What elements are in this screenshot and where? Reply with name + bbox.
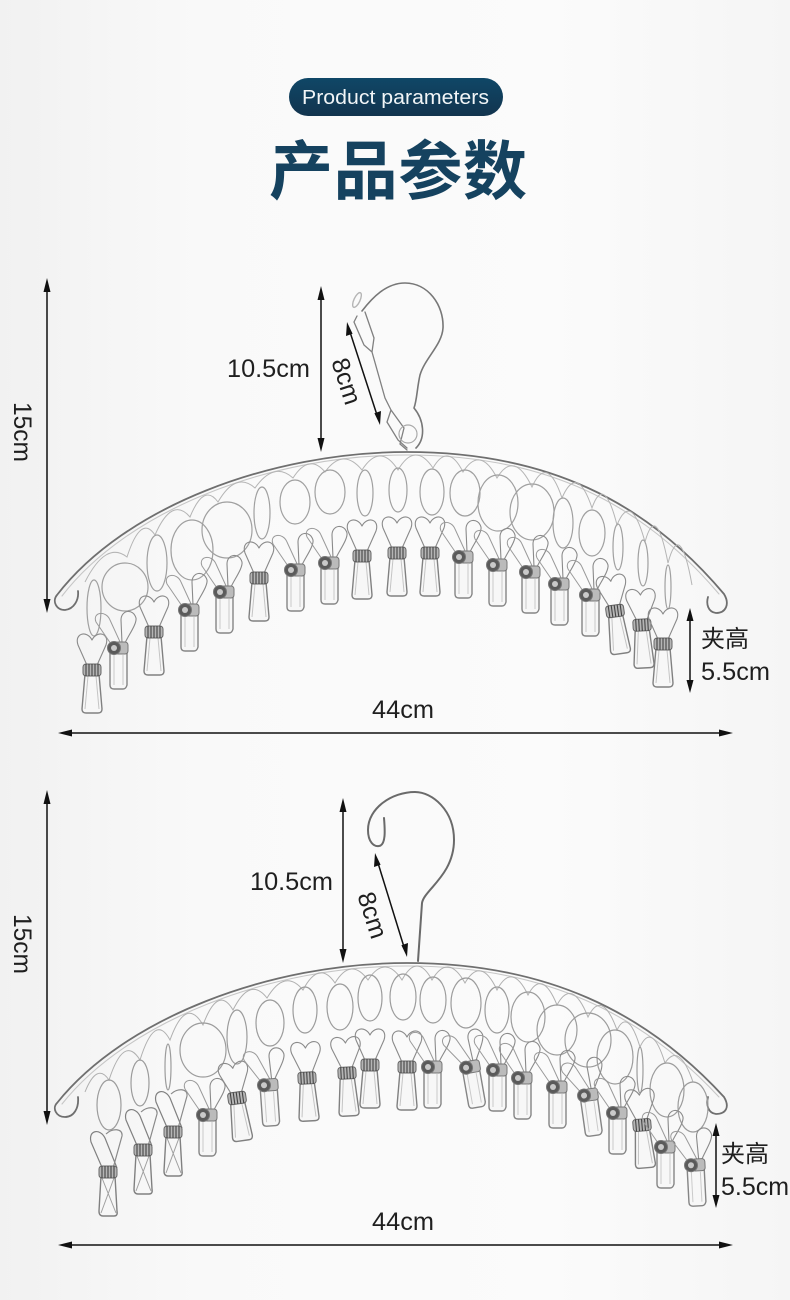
dimension: 10.5cm hook height, bottom: 10.5cm <box>250 868 333 896</box>
one-piece hook <box>368 792 454 961</box>
dimension: 8cm hook opening, top: 8cm <box>325 355 367 408</box>
dimension: clip height 5.5cm, top <box>686 608 770 693</box>
dimension: width 44cm, bottom <box>58 1208 733 1248</box>
hook with folding links <box>351 283 443 450</box>
badge: Product parameters: Product parameters <box>302 87 489 109</box>
dimension: width 44cm, bottom: 44cm <box>372 1208 434 1236</box>
dimension: 10.5cm hook height, top: 10.5cm <box>227 355 310 383</box>
dimension: clip height 5.5cm, bottom: 5.5cm <box>721 1173 789 1201</box>
main curved bar <box>55 452 727 613</box>
hanger diagram: bottom, with fixed hook <box>55 792 727 1216</box>
dimension: 15cm total height, top: 15cm <box>8 402 36 462</box>
dimension: clip height 5.5cm, bottom: 夹高 <box>721 1141 769 1168</box>
scalloped inner wire <box>85 455 692 585</box>
dimension: 10.5cm hook height, top <box>227 286 324 452</box>
rings <box>97 974 708 1132</box>
dimension: clip height 5.5cm, top: 5.5cm <box>701 658 770 686</box>
badge: Product parameters <box>289 78 503 116</box>
clothes pegs <box>77 517 678 713</box>
hanger diagram: top, with folding hook <box>55 283 727 713</box>
scalloped inner wire <box>85 966 693 1092</box>
main curved bar <box>55 963 727 1117</box>
clothes pegs <box>91 1028 715 1216</box>
rings <box>87 468 671 636</box>
dimension: 8cm hook opening, top <box>325 322 381 425</box>
dimension: 8cm hook opening, bottom <box>351 853 408 957</box>
dimension: 8cm hook opening, bottom: 8cm <box>351 889 393 942</box>
dimension: width 44cm, top: 44cm <box>372 696 434 724</box>
dimension: 15cm total height, bottom: 15cm <box>8 914 36 974</box>
title: 产品参数 <box>269 136 527 208</box>
dimension: 15cm total height, top <box>8 278 50 613</box>
dimension: 15cm total height, bottom <box>8 790 50 1125</box>
dimension: width 44cm, top <box>58 696 733 736</box>
dimension: 10.5cm hook height, bottom <box>250 798 346 963</box>
dimension: clip height 5.5cm, bottom <box>712 1123 789 1208</box>
dimension: clip height 5.5cm, top: 夹高 <box>701 626 749 653</box>
